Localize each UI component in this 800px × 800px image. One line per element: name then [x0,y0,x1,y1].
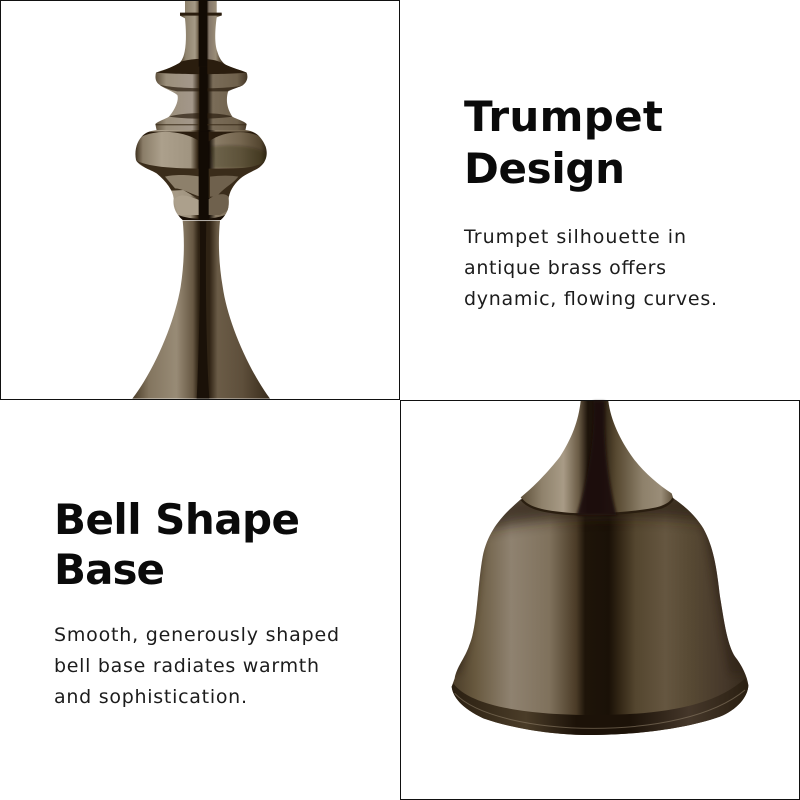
panel: bell photo [400,400,800,800]
text: bell description [54,624,339,708]
text: trumpet description: antique brass offers [464,257,666,279]
text: bell description: Smooth, generously shaped [54,624,339,646]
dark shoulder shading [490,499,702,536]
image: bell shaped base [447,401,753,735]
heading: Trumpet Design: Trumpet [464,92,663,141]
heading: Bell Shape Base [54,495,300,594]
heading: Bell Shape Base: Base [54,545,165,594]
text: bell description: and sophistication. [54,686,247,708]
text: bell description: bell base radiates warmth [54,655,319,677]
image: candlestick trumpet stem [132,0,270,399]
heading: Bell Shape Base: Bell Shape [54,495,300,544]
heading: Trumpet Design [464,92,663,193]
text: trumpet description [463,226,717,310]
text: trumpet description: dynamic, flowing curves. [464,288,717,310]
heading: Trumpet Design: Design [464,144,625,193]
panel: trumpet photo [0,0,400,400]
text: trumpet description: Trumpet silhouette in [463,226,686,248]
